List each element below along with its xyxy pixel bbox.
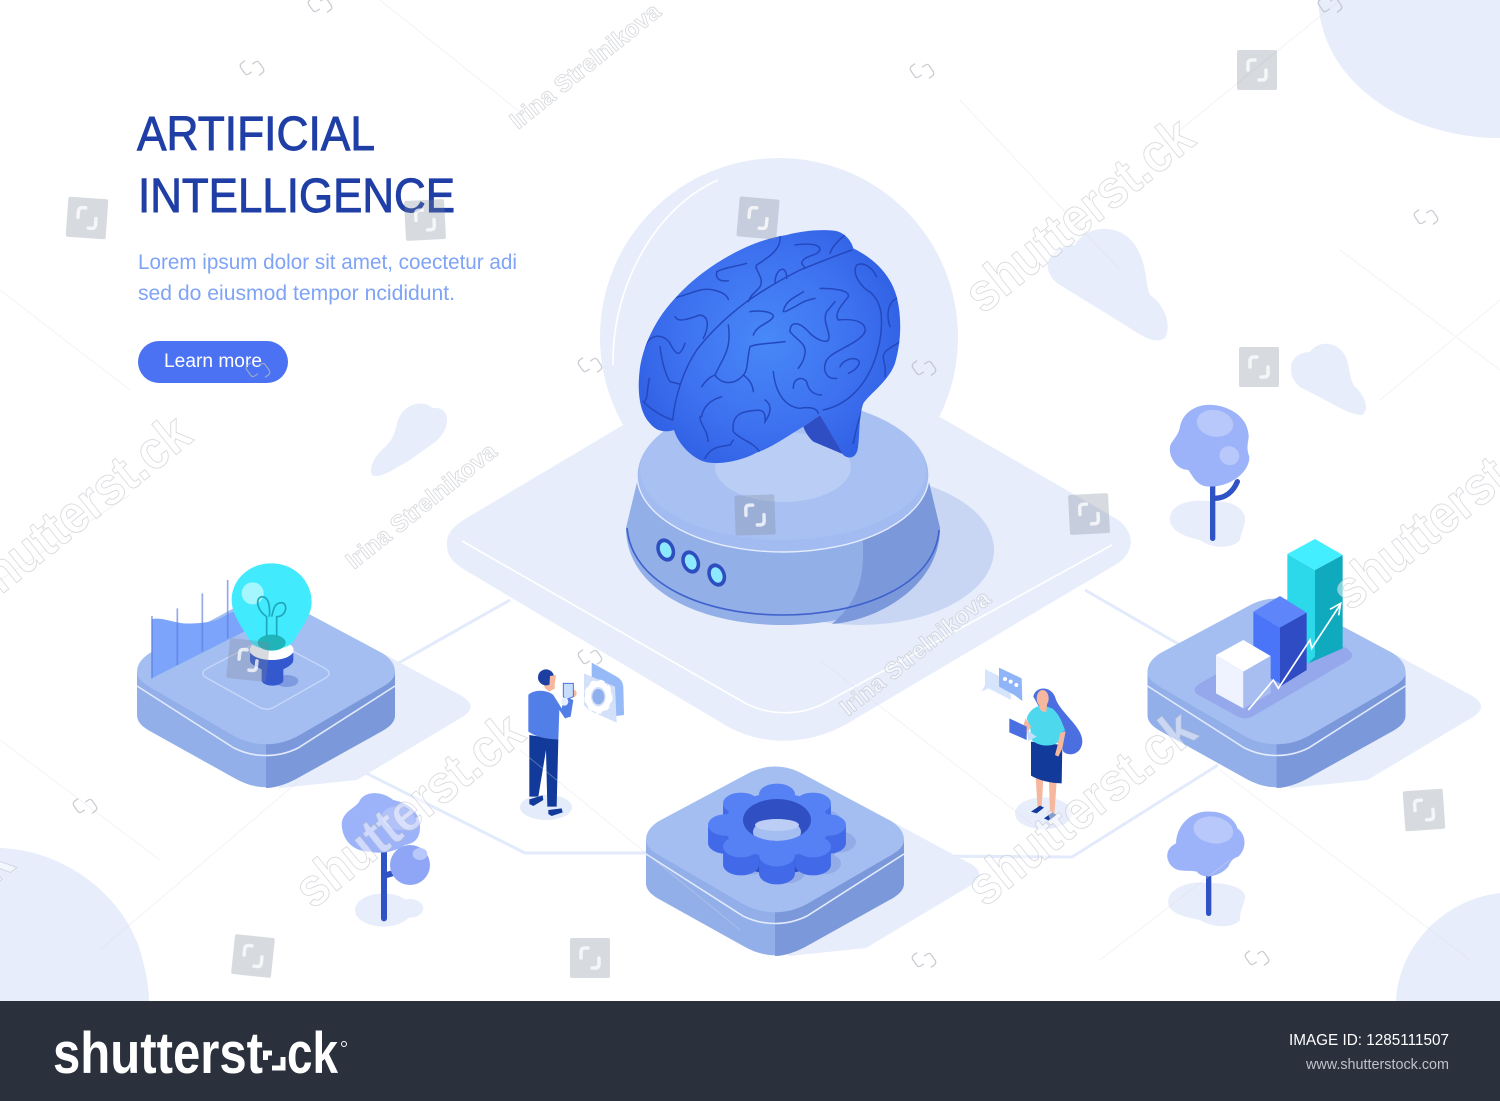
pedestal rim line: [627, 528, 939, 615]
tall cyan bar: [1287, 539, 1343, 663]
speech bubbles: [982, 668, 1022, 701]
centre gear platform: [646, 766, 980, 956]
watermark text: shutterst.ck: [955, 698, 1208, 917]
subtitle text: Lorem ipsum dolor sit amet, coectetur adi: [138, 251, 517, 274]
tree: lower right: [1167, 812, 1245, 926]
shutterstock logo: ck: [287, 1021, 339, 1086]
central isometric platform: [447, 158, 1131, 741]
dome highlight: [613, 180, 718, 365]
gear face: [708, 784, 846, 866]
watermark text: Irina Strelnikova: [341, 438, 503, 575]
tree: upper right: [1170, 405, 1249, 547]
person: woman with laptop: [982, 668, 1082, 829]
pedestal top: [640, 400, 926, 540]
pedestal shadow: [726, 475, 994, 625]
person: man with phone: [520, 663, 624, 820]
watermark text: Irina Strelnikova: [835, 585, 997, 722]
bar chart with rising arrow: [1195, 539, 1352, 718]
title: ARTIFICIAL: [137, 108, 375, 161]
chart pad: [1195, 627, 1352, 718]
shutterstock logo: shutterst: [53, 1021, 263, 1086]
website: www.shutterstock.com: [1305, 1057, 1449, 1073]
clouds: [371, 229, 1366, 476]
pedestal centre disc: [715, 432, 851, 502]
slab marker: [203, 640, 329, 709]
footer bar: [0, 1001, 1500, 1101]
icon: light bulb with area chart: [152, 563, 329, 709]
right platform: [1148, 598, 1481, 788]
pedestal body: [626, 478, 940, 625]
glass dome: [600, 158, 958, 516]
network connector lines: [330, 590, 1218, 857]
indicator lights: [653, 536, 730, 589]
tree: lower left: [342, 793, 430, 927]
watermark stamps: [66, 50, 1445, 978]
brain pedestal: [626, 398, 994, 625]
pedestal shaded side: [832, 478, 940, 624]
subtitle text: sed do eiusmod tempor ncididunt.: [138, 282, 455, 305]
medium blue bar: [1253, 596, 1307, 687]
icon: brain: [639, 230, 900, 463]
gear shadow: [718, 801, 856, 883]
learn more button: [138, 341, 288, 383]
icon: gear: [708, 784, 856, 884]
watermark text: Irina Strelnikova: [505, 0, 667, 135]
area chart: [152, 611, 247, 678]
subtitle text: [138, 251, 517, 305]
arrow: [1248, 603, 1341, 710]
title: INTELLIGENCE: [138, 170, 455, 223]
watermark text: shutterst.ck: [953, 105, 1206, 324]
gear hole: [743, 799, 811, 841]
left platform: [137, 598, 471, 788]
image id: IMAGE ID: 1285111507: [1289, 1032, 1449, 1049]
gear side: [708, 787, 846, 884]
title: [137, 108, 455, 223]
watermark text: shutterst.ck: [283, 700, 536, 919]
learn more button: Learn more: [164, 351, 262, 372]
floating gear card: [584, 663, 624, 723]
white cube: [1216, 640, 1271, 708]
